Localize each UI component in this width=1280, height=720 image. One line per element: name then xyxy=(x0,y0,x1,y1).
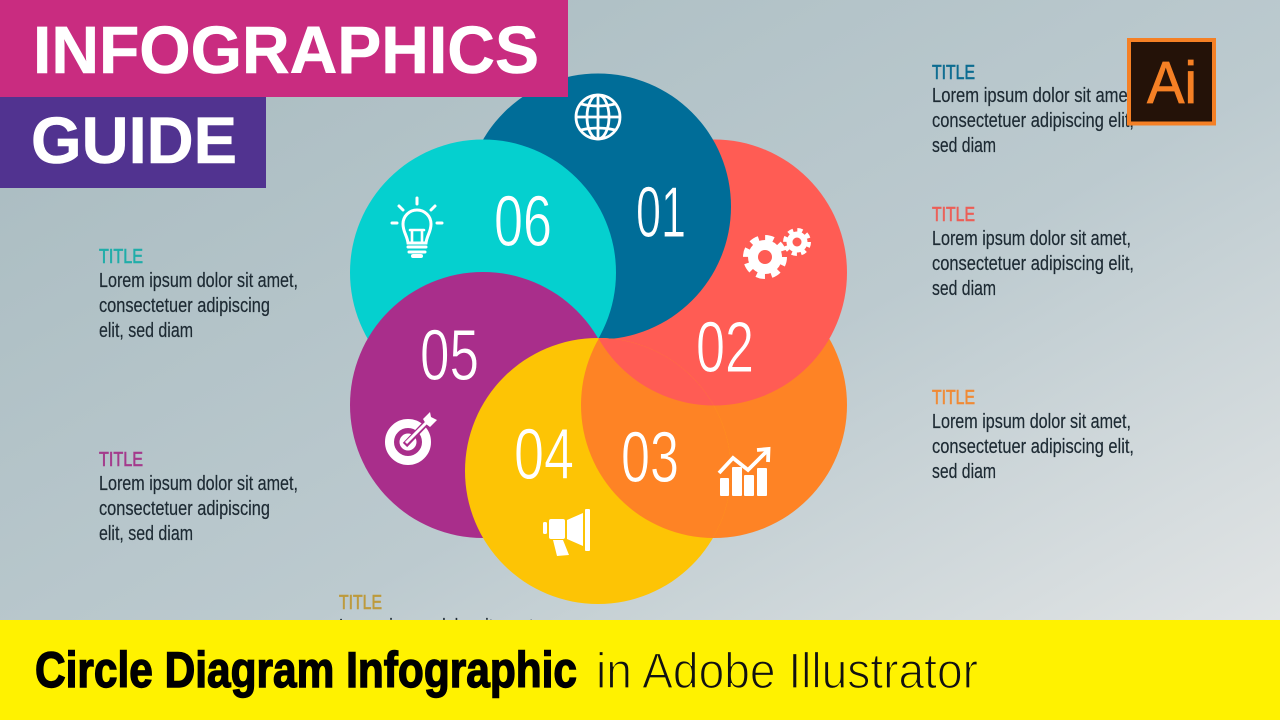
text block: title 04: TITLE xyxy=(339,592,382,614)
icon: globe xyxy=(576,95,620,139)
banner: infographics: INFOGRAPHICS xyxy=(33,13,539,88)
text block: title 01: sed diam xyxy=(932,135,996,157)
number 03: 03 xyxy=(621,418,679,498)
text block: title 06: Lorem ipsum dolor sit amet, xyxy=(99,270,298,292)
text block: title 06: TITLE xyxy=(99,246,143,268)
icon: adobe illustrator logo: Ai xyxy=(1147,50,1197,116)
icon: adobe illustrator logo xyxy=(1129,40,1214,124)
text block: title 01: TITLE xyxy=(932,62,975,84)
banner: yellow footer xyxy=(0,620,1280,720)
text block: title 02: sed diam xyxy=(932,278,996,300)
text block: title 04 xyxy=(339,592,538,638)
icon: gears xyxy=(746,230,809,276)
text block: title 05: consectetuer adipiscing xyxy=(99,498,270,520)
number 01: 01 xyxy=(636,173,686,253)
text block: title 02 xyxy=(932,204,1134,300)
icon: lightbulb xyxy=(392,198,442,256)
text block: title 05: Lorem ipsum dolor sit amet, xyxy=(99,473,298,495)
icon: megaphone xyxy=(543,509,590,556)
text block: title 01: consectetuer adipiscing elit, xyxy=(932,110,1134,132)
text block: title 03: Lorem ipsum dolor sit amet, xyxy=(932,411,1131,433)
banner: guide xyxy=(0,97,266,188)
footer subheading: in Adobe Illustrator xyxy=(596,643,978,699)
number 04: 04 xyxy=(514,415,574,495)
text block: title 05: TITLE xyxy=(99,449,143,471)
number 05: 05 xyxy=(420,316,479,396)
text block: title 04: Lorem ipsum dolor sit amet, xyxy=(339,616,538,638)
text block: title 06 xyxy=(99,246,298,342)
number 06: 06 xyxy=(494,182,552,262)
text block: title 03 xyxy=(932,387,1134,483)
banner: infographics xyxy=(0,0,568,97)
text block: title 06: consectetuer adipiscing xyxy=(99,295,270,317)
circle diagram xyxy=(350,74,847,604)
text block: title 03: TITLE xyxy=(932,387,975,409)
text block: title 03: consectetuer adipiscing elit, xyxy=(932,436,1134,458)
icon: chart xyxy=(719,449,768,496)
text block: title 03: sed diam xyxy=(932,461,996,483)
banner: guide: GUIDE xyxy=(31,103,237,177)
text block: title 01: Lorem ipsum dolor sit amet, xyxy=(932,85,1137,107)
text block: title 06: elit, sed diam xyxy=(99,320,193,342)
text block: title 05: elit, sed diam xyxy=(99,523,193,545)
icon: target xyxy=(390,412,437,460)
text block: title 02: consectetuer adipiscing elit, xyxy=(932,253,1134,275)
text block: title 02: TITLE xyxy=(932,204,975,226)
text block: title 01 xyxy=(932,62,1137,157)
text block: title 02: Lorem ipsum dolor sit amet, xyxy=(932,228,1131,250)
footer heading: Circle Diagram Infographic xyxy=(35,642,577,698)
number 02: 02 xyxy=(696,308,754,388)
text block: title 05 xyxy=(99,449,298,545)
